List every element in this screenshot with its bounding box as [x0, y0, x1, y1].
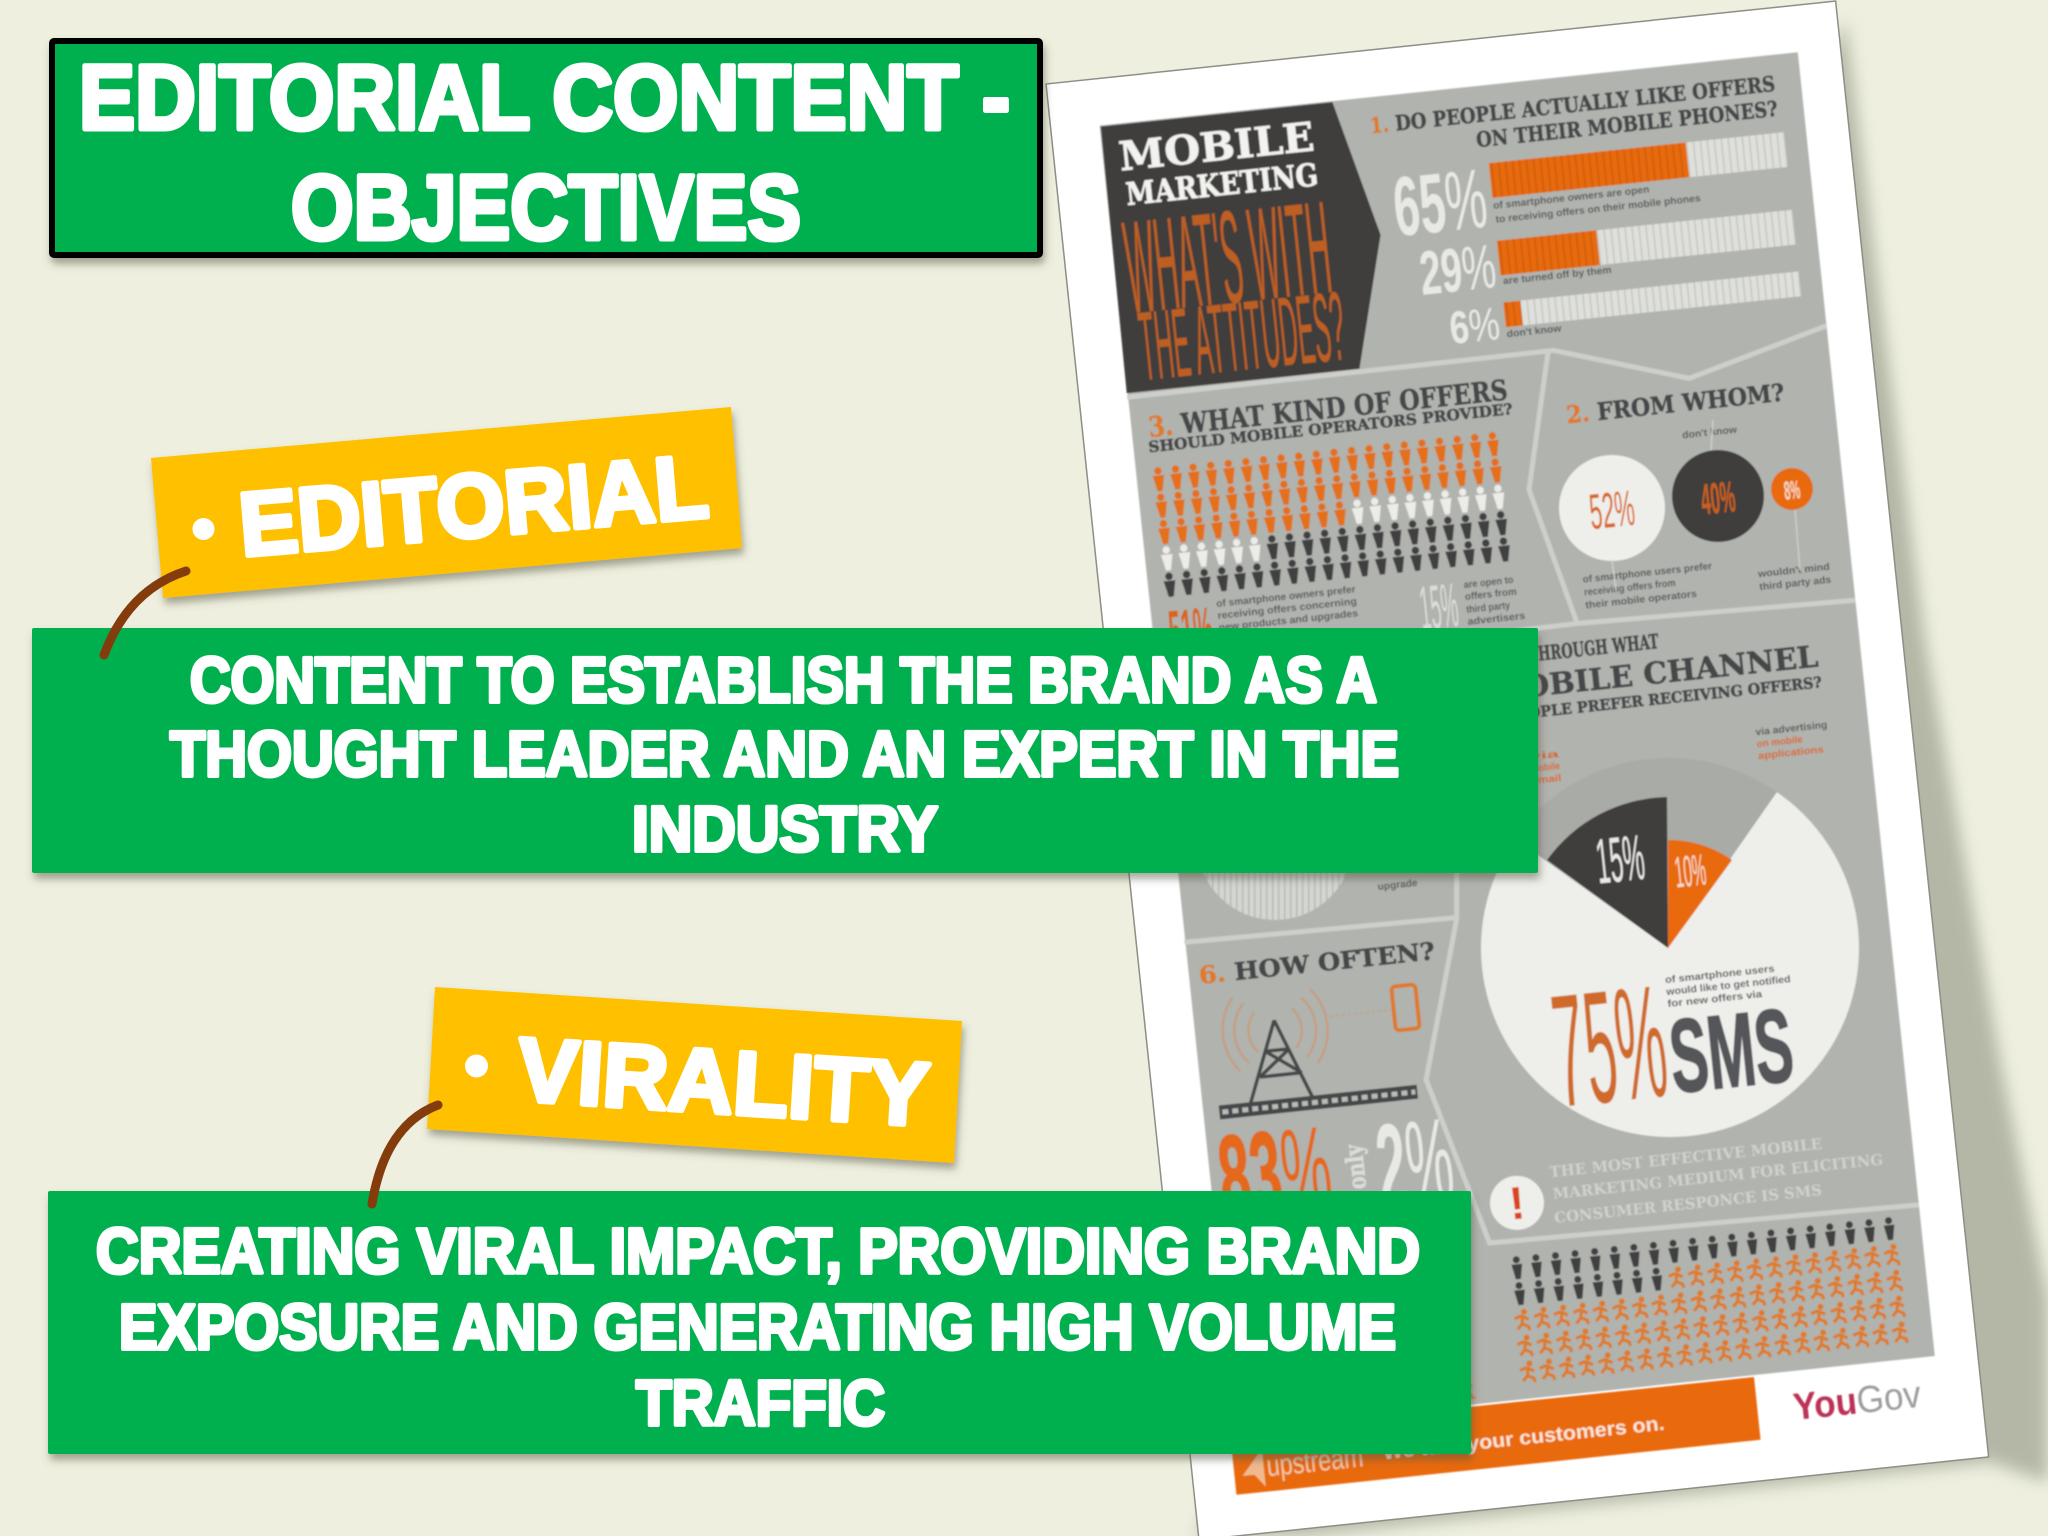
- heading: mobile marketing: MOBILE: [1117, 113, 1316, 181]
- value 83 percent: 83%: [1212, 1102, 1338, 1244]
- description line 2: EXPOSURE AND GENERATING HIGH VOLUME: [119, 1291, 1396, 1363]
- section 1 question: 1. DO PEOPLE ACTUALLY LIKE OFFERS: [1369, 71, 1776, 138]
- rotated infographic layout: [1093, 52, 1942, 1495]
- pie labels: 10%: [1672, 845, 1708, 897]
- dark title block: [1099, 99, 1395, 403]
- section 3: kinds of offers: 15%: [1416, 571, 1461, 644]
- title line 2: OBJECTIVES: [291, 157, 801, 259]
- string: editorial tag: [104, 571, 186, 655]
- value 6 percent: 6%: [1447, 297, 1502, 354]
- title box: [52, 41, 1040, 259]
- section 3: kinds of offers: third party: [1466, 600, 1511, 616]
- section 1: offers bars: don't know: [1506, 323, 1562, 340]
- section 3: kinds of offers: 51%: [1166, 595, 1216, 668]
- section 6: how often: [1196, 936, 1463, 1249]
- caption: top advertising: via advertising: [1755, 720, 1828, 738]
- pie gray rim: [1514, 758, 1777, 948]
- callout text: MARKETING MEDIUM FOR ELICITING: [1552, 1150, 1884, 1203]
- description line 1: CONTENT TO ESTABLISH THE BRAND AS A: [190, 644, 1377, 716]
- bubble 52 percent: [1559, 455, 1665, 561]
- icon: tower beam: [1219, 1085, 1418, 1119]
- section 1: offers bars: are turned off by them: [1503, 265, 1612, 287]
- bubble 40 percent: 40%: [1699, 472, 1738, 525]
- caption: third party: wouldn't mind: [1757, 562, 1830, 580]
- section 1: offers bars: [1369, 70, 1803, 360]
- tag text: EDITORIAL: [235, 437, 712, 576]
- tagline: We turn your customers on.: [1382, 1413, 1666, 1464]
- label: don't know: don't know: [1682, 425, 1738, 441]
- icon: signal arcs: [1219, 988, 1331, 1072]
- bubble leader lines: [1612, 420, 1800, 590]
- bar 6 percent: [1503, 271, 1801, 327]
- caption: upgrade: upgrade: [1377, 878, 1419, 893]
- pie labels: would like to get notified: [1665, 974, 1791, 998]
- pie labels: 75%: [1545, 951, 1675, 1141]
- yougov logo: YouGov: [1791, 1374, 1923, 1429]
- rotated infographic layout: WHAT'S WITH: [1118, 174, 1337, 341]
- caption: operators: of smartphone users prefer: [1582, 561, 1713, 586]
- tag bullet: [465, 1054, 488, 1078]
- tag: editorial: [151, 407, 742, 598]
- people pictogram: [1149, 430, 1515, 599]
- description line 1: CREATING VIRAL IMPACT, PROVIDING BRAND: [96, 1215, 1420, 1287]
- pie slice 15 percent: [1547, 797, 1668, 948]
- section 2: from whom text: their mobile operators: [1585, 589, 1698, 611]
- section 3: kinds of offers: offers from: [1464, 587, 1517, 603]
- section 2: from whom text: [1564, 375, 1832, 611]
- title line 1: EDITORIAL CONTENT -: [79, 47, 1010, 149]
- value 65 percent: 65%: [1389, 151, 1491, 254]
- tag text: VIRALITY: [515, 1020, 932, 1146]
- tag bullet: [192, 518, 214, 540]
- bubble 52 percent: 52%: [1587, 480, 1637, 540]
- section 3: kinds of offers: [1143, 373, 1536, 670]
- icon: exclamation: [1487, 1173, 1547, 1233]
- section 3: kinds of offers: new products and upgrades: [1218, 608, 1359, 634]
- section 1: offers bars: ON THEIR MOBILE PHONES?: [1475, 96, 1779, 152]
- bubble chart: from whom: [1559, 420, 1813, 590]
- section 2 heading: 2. FROM WHOM?: [1565, 378, 1786, 429]
- sms label: SMS: [1664, 988, 1799, 1116]
- panel: editorial description: [32, 628, 1538, 873]
- section 1: offers bars: to receiving offers on their mobile phones: [1495, 193, 1702, 226]
- section 3: kinds of offers: advertisers: [1467, 611, 1526, 628]
- section 5 heading line 3: DO PEOPLE PREFER RECEIVING OFFERS?: [1476, 673, 1823, 727]
- upstream logo: upstream: [1265, 1440, 1365, 1483]
- callout text: THE MOST EFFECTIVE MOBILE: [1549, 1135, 1823, 1181]
- heading: marketing: MARKETING: [1124, 157, 1320, 213]
- caption 51 percent: of smartphone owners prefer: [1216, 584, 1356, 610]
- section 3 subheading: SHOULD MOBILE OPERATORS PROVIDE?: [1148, 400, 1514, 456]
- value 2 percent: 2%: [1370, 1094, 1459, 1233]
- partly hidden striped circle: [1197, 764, 1353, 920]
- section 2: from whom text: third party ads: [1759, 575, 1832, 593]
- rotated infographic layout: THE ATTITUDES?: [1134, 270, 1350, 401]
- description line 3: TRAFFIC: [636, 1367, 885, 1439]
- bar captions: of smartphone owners are open: [1493, 185, 1650, 212]
- footer bar: [1230, 1377, 1761, 1495]
- tag: virality: [427, 987, 962, 1163]
- paper shadow: [1197, 20, 2048, 1536]
- pie labels: [1531, 807, 1805, 1141]
- pie chart: preferred channel: [1481, 758, 1859, 1141]
- section 5: channel text: on mobile: [1756, 734, 1804, 750]
- label: only: only: [1339, 1142, 1372, 1191]
- bubble 8 percent: 8%: [1782, 474, 1802, 506]
- section 5: channel text: email: [1531, 773, 1562, 787]
- caption 15 percent: are open to: [1463, 575, 1514, 591]
- description line 2: THOUGHT LEADER AND AN EXPERT IN THE: [170, 718, 1399, 790]
- caption sms: of smartphone users: [1665, 964, 1776, 986]
- icon: radio tower: [1242, 1017, 1312, 1103]
- section 7: people and runners pictogram: [1506, 1215, 1911, 1386]
- string: virality tag: [372, 1105, 438, 1204]
- callout: most effective medium: [1486, 1129, 1886, 1234]
- gray background: [1100, 52, 1935, 1429]
- section 5 heading line 2: MOBILE CHANNEL: [1488, 640, 1820, 709]
- infographic content: [1093, 52, 1942, 1495]
- callout text: CONSUMER RESPONCE IS SMS: [1553, 1181, 1823, 1227]
- section dividers: [1127, 322, 1919, 1278]
- value 29 percent: 29%: [1416, 232, 1499, 309]
- pie labels: for new offers via: [1667, 989, 1763, 1010]
- section 3: kinds of offers: receiving offers concerning: [1217, 596, 1357, 622]
- bubble 8 percent: [1771, 468, 1813, 510]
- section 6 heading: 6. HOW OFTEN?: [1197, 936, 1436, 990]
- description line 3: INDUSTRY: [632, 793, 938, 865]
- section 3 heading: 3. WHAT KIND OF OFFERS: [1147, 374, 1509, 444]
- icon: dashed signal line: [1330, 1010, 1391, 1016]
- panel: virality description: [48, 1191, 1471, 1454]
- icon: upstream arrow: [1240, 1449, 1266, 1489]
- pie slice 10 percent: [1668, 840, 1732, 948]
- paper sheet: [1046, 1, 1989, 1536]
- section 5 heading line 1: THROUGH WHAT: [1527, 629, 1660, 667]
- icon: exclamation: !: [1507, 1176, 1527, 1230]
- section 5: channel text: applications: [1758, 744, 1825, 762]
- pie white 75 percent: [1481, 759, 1859, 1137]
- section 2: from whom text: receiving offers from: [1584, 578, 1676, 599]
- section 5: channel text: [1469, 612, 1830, 792]
- panel: infographic print on rotated paper: [1046, 1, 1989, 1536]
- pie labels: 15%: [1593, 821, 1648, 898]
- icon: phone: [1391, 984, 1420, 1031]
- bar 29 percent: [1497, 210, 1796, 276]
- caption: left orange: via: [1528, 749, 1560, 763]
- callout text: [1549, 1129, 1886, 1227]
- bar 65 percent: [1489, 132, 1788, 198]
- bubble 40 percent: [1672, 450, 1764, 542]
- section 7 heading fragment: OVER: [1396, 1375, 1477, 1412]
- section 5: channel text: mobile: [1530, 761, 1561, 775]
